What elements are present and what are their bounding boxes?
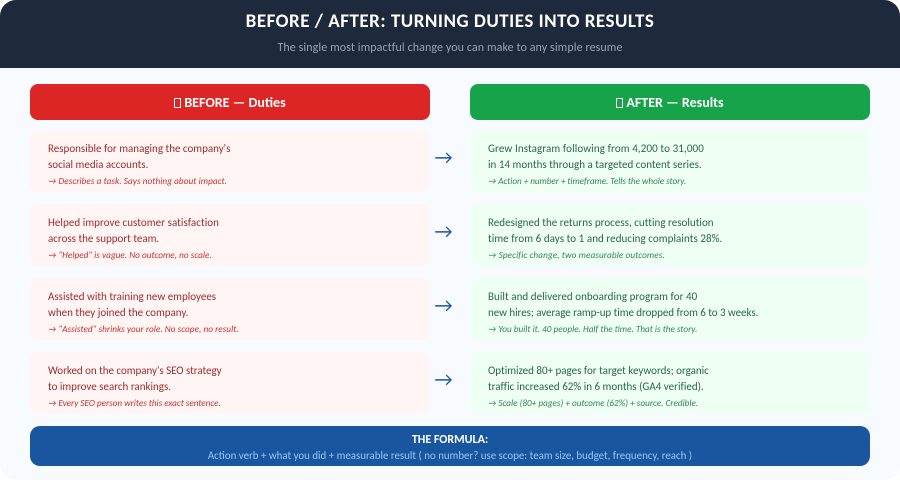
before text: Helped improve customer satisfaction	[48, 216, 219, 229]
header band	[0, 0, 900, 68]
before column header: BEFORE — Duties	[184, 94, 286, 111]
before text: social media accounts.	[48, 158, 148, 171]
before note: → Every SEO person writes this exact sentence.	[48, 398, 221, 409]
formula title: THE FORMULA:	[412, 433, 488, 447]
row 3 arrow: →	[434, 294, 453, 318]
row 2 before	[30, 204, 430, 266]
after note: → Action + number + timeframe. Tells the whole story.	[488, 176, 686, 187]
after note: → You built it. 40 people. Half the time. That is the story.	[488, 324, 697, 335]
before text: across the support team.	[48, 232, 159, 245]
before note: → "Assisted" shrinks your role. No scope, no result.	[48, 324, 239, 335]
row 2 after	[470, 204, 870, 266]
after text: traffic increased 62% in 6 months (GA4 verified).	[488, 380, 704, 393]
before text	[48, 364, 222, 393]
after text: in 14 months through a targeted content series.	[488, 158, 702, 171]
title: BEFORE / AFTER: TURNING DUTIES INTO RESULTS	[246, 10, 654, 33]
after note: → Scale (80+ pages) + outcome (62%) + source. Credible.	[488, 398, 698, 409]
before text: Worked on the company's SEO strategy	[48, 364, 222, 377]
after text: Grew Instagram following from 4,200 to 31,000	[488, 142, 704, 155]
before text	[48, 142, 230, 171]
row 3 after	[470, 278, 870, 340]
after text	[488, 142, 704, 171]
formula text: Action verb + what you did + measurable result ( no number? use scope: team size, budget, frequency, reach )	[208, 449, 692, 462]
row 1 after	[470, 130, 870, 192]
after text: Redesigned the returns process, cutting resolution	[488, 216, 714, 229]
before text: Assisted with training new employees	[48, 290, 216, 303]
after column header	[470, 84, 870, 120]
before text	[48, 216, 219, 245]
row 4 before	[30, 352, 430, 414]
after column header: AFTER — Results	[626, 94, 724, 111]
before text	[48, 290, 216, 319]
after text: Optimized 80+ pages for target keywords; organic	[488, 364, 709, 377]
after note: → Specific change, two measurable outcomes.	[488, 250, 665, 261]
row 3 before	[30, 278, 430, 340]
before text: to improve search rankings.	[48, 380, 171, 393]
row 4 after	[470, 352, 870, 414]
after text: time from 6 days to 1 and reducing complaints 28%.	[488, 232, 722, 245]
before column header	[30, 84, 430, 120]
row 1 arrow: →	[434, 146, 453, 170]
subtitle: The single most impactful change you can make to any simple resume	[277, 41, 623, 55]
before note: → Describes a task. Says nothing about impact.	[48, 176, 227, 187]
after text	[488, 216, 722, 245]
after text	[488, 290, 758, 319]
formula bar	[30, 426, 870, 466]
before text: when they joined the company.	[48, 306, 188, 319]
before note: → "Helped" is vague. No outcome, no scale.	[48, 250, 212, 261]
row 2 arrow: →	[434, 220, 453, 244]
after text: new hires; average ramp-up time dropped from 6 to 3 weeks.	[488, 306, 758, 319]
row 4 arrow: →	[434, 368, 453, 392]
after text: Built and delivered onboarding program for 40	[488, 290, 697, 303]
before text: Responsible for managing the company's	[48, 142, 230, 155]
row 1 before	[30, 130, 430, 192]
after text	[488, 364, 709, 393]
